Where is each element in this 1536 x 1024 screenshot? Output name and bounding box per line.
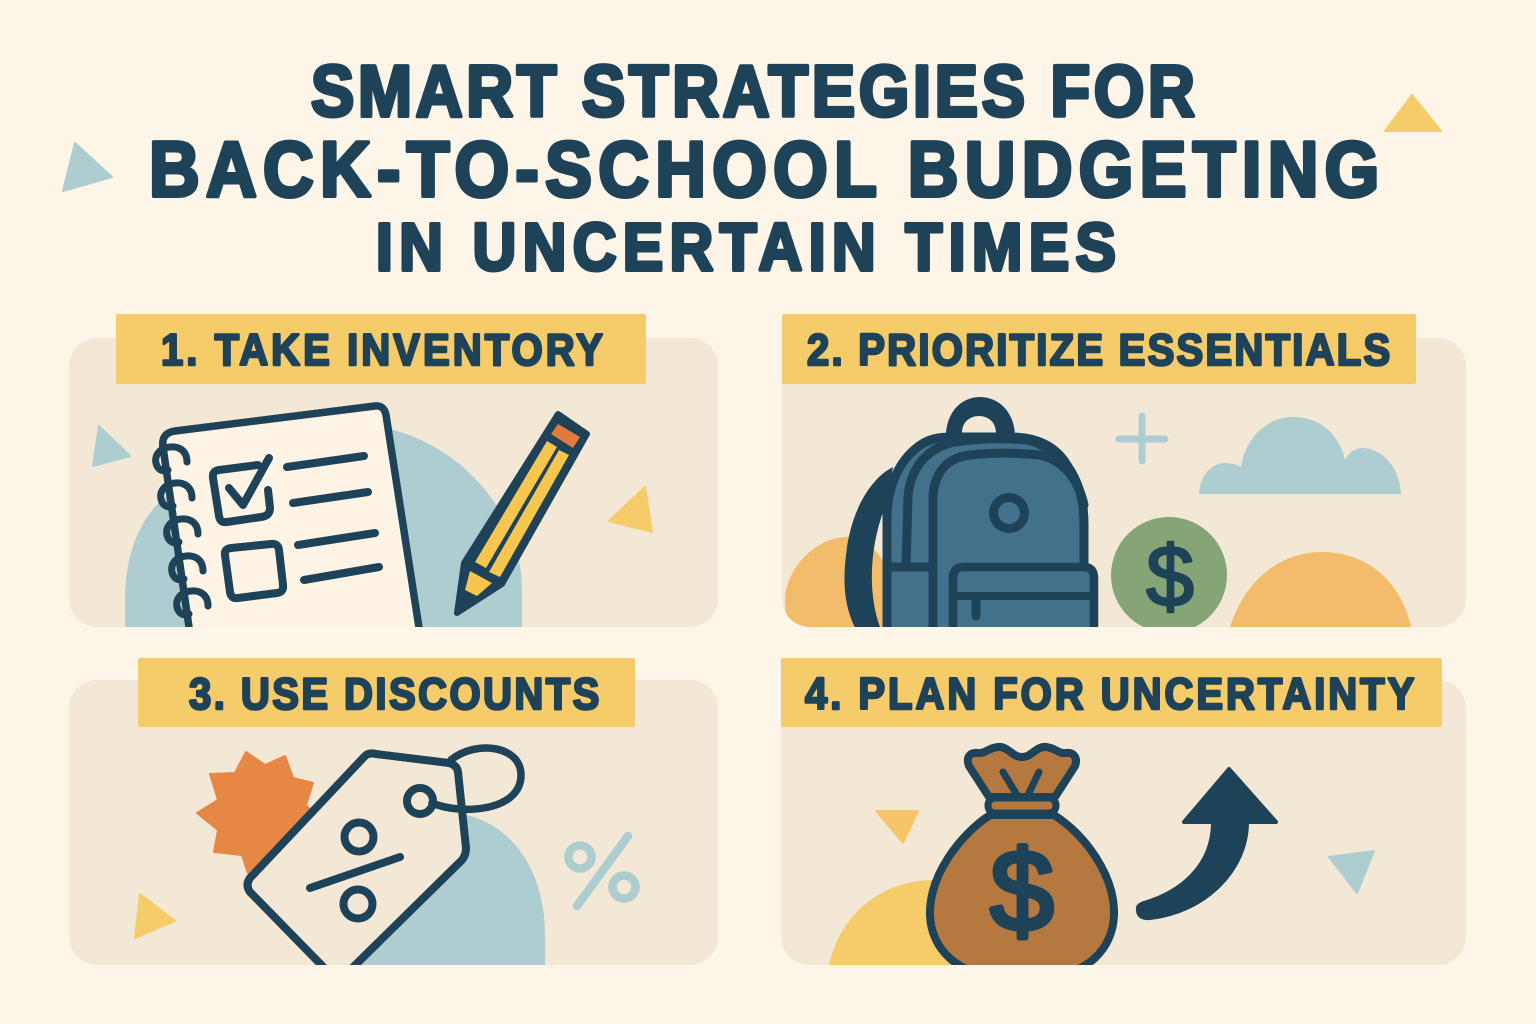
- orange hill left: [785, 537, 882, 627]
- panel background 4: [781, 680, 1466, 965]
- yellow hill: [829, 880, 952, 965]
- decorative triangle: blue: [63, 143, 112, 191]
- title: IN UNCERTAIN TIMES: [376, 209, 1116, 285]
- panel background 1: [69, 338, 718, 627]
- icon: starburst: [197, 752, 320, 873]
- icon: plus: [1119, 416, 1165, 461]
- triangle: yellow: [876, 811, 918, 843]
- icon: price tag: [248, 748, 521, 982]
- icon: cloud: [1199, 417, 1401, 494]
- panel: take inventory: [69, 314, 718, 634]
- icon: coin: [1111, 517, 1227, 633]
- heading banner 1: [116, 314, 646, 384]
- heading banner 2: 2. PRIORITIZE ESSENTIALS: [807, 325, 1390, 374]
- icon: money bag: $: [990, 828, 1054, 955]
- icon: coin: $: [1146, 529, 1194, 625]
- heading banner 4: [781, 658, 1442, 727]
- panel background 2: [782, 338, 1466, 627]
- panel background 3: [69, 680, 718, 965]
- triangle: blue: [1329, 851, 1374, 893]
- title: BACK-TO-SCHOOL BUDGETING: [149, 126, 1379, 213]
- heading banner 3: [138, 658, 635, 727]
- heading banner 3: 3. USE DISCOUNTS: [189, 669, 599, 718]
- decorative triangle: yellow: [1385, 95, 1441, 131]
- arrow: [1138, 769, 1276, 918]
- icon: money bag: [930, 747, 1114, 975]
- icon: notebook checklist: [156, 406, 420, 634]
- triangle: yellow: [135, 894, 175, 938]
- title: [149, 51, 1379, 285]
- panel: use discounts: [69, 658, 718, 982]
- title: SMART STRATEGIES FOR: [311, 51, 1195, 132]
- blue arch behind notebook: [125, 424, 522, 627]
- heading banner 1: 1. TAKE INVENTORY: [161, 325, 603, 374]
- panel: plan for uncertainty: [781, 658, 1466, 975]
- triangle: yellow: [609, 487, 652, 532]
- triangle: blue: [93, 426, 130, 466]
- icon: blue percent: [568, 836, 636, 906]
- orange hill right: [1230, 552, 1411, 627]
- panel: prioritize essentials: [782, 314, 1466, 633]
- blue arch: [350, 812, 545, 965]
- heading banner 4: 4. PLAN FOR UNCERTAINTY: [805, 669, 1414, 718]
- icon: pencil: [457, 414, 587, 613]
- heading banner 2: [782, 314, 1416, 384]
- icon: backpack: [844, 397, 1094, 632]
